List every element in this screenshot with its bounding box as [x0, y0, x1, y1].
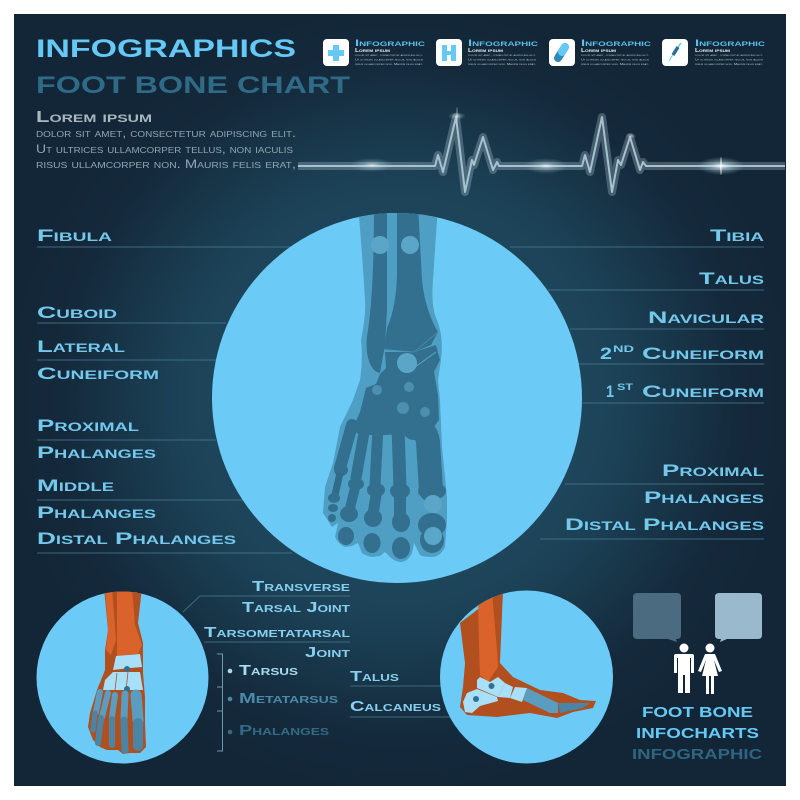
phalanges	[328, 464, 446, 559]
speech bubble: right	[715, 593, 762, 642]
intro text	[36, 109, 296, 171]
right labels: ND	[613, 344, 635, 354]
left labels: Fibula	[37, 226, 113, 245]
icon block: medical cross: Infographic	[355, 38, 426, 48]
icon block: syringe: dolor sit amet, consectetur adipiscing elit.	[695, 53, 763, 57]
bracket list: foot regions: Phalanges	[239, 723, 329, 739]
fibula	[105, 588, 116, 655]
right labels: Phalanges	[644, 488, 764, 507]
icon block: hospital H: Infographic	[468, 38, 539, 48]
right labels: Cuneiform	[642, 382, 764, 401]
left labels: Phalanges	[37, 443, 156, 462]
icon block: capsule: Lorem ipsum	[581, 48, 617, 54]
left labels: Cuboid	[37, 303, 118, 322]
icon block: medical cross: dolor sit amet, consectetur adipiscing elit.	[355, 53, 423, 57]
icon row	[323, 38, 766, 66]
icon block: medical cross: Lorem ipsum	[355, 48, 391, 54]
label group: joints: Tarsometatarsal	[204, 625, 350, 641]
left labels: Distal Phalanges	[37, 529, 236, 548]
footer title: INFOGRAPHIC	[632, 747, 763, 763]
soft tissue	[88, 588, 146, 754]
right labels: 2	[600, 344, 612, 363]
right labels: Talus	[699, 269, 764, 288]
icon block: syringe: Ut ultrices ullamcorper tellus, non iaculis	[695, 58, 764, 62]
tibia	[117, 588, 142, 656]
tibia	[384, 205, 438, 352]
leader lines: main labels	[37, 247, 764, 553]
bracket list: foot regions: Tarsus	[239, 663, 298, 679]
label group: joints	[183, 579, 350, 661]
label group: talus and calcaneus: Talus	[350, 669, 399, 685]
speech bubble: left	[633, 593, 681, 642]
tibia	[478, 592, 498, 682]
footer title: FOOT BONE	[642, 705, 753, 721]
main circle: foot X-ray	[212, 205, 582, 583]
bracket list: foot regions: Metatarsus	[239, 691, 338, 707]
icon block: syringe: risus ullamcorper non. Mauris felis erat.	[695, 62, 763, 66]
icon: man	[674, 644, 694, 693]
icon block: hospital H: Lorem ipsum	[468, 48, 504, 54]
icon block: medical cross: risus ullamcorper non. Mauris felis erat.	[355, 62, 423, 66]
icon: woman	[698, 644, 722, 694]
left labels: Middle	[37, 476, 114, 495]
icon block: capsule	[549, 38, 652, 66]
footer title: INFOCHARTS	[636, 726, 759, 742]
intro text: Lorem ipsum	[36, 109, 152, 126]
label group: joints: Transverse	[252, 579, 350, 595]
right labels: Cuneiform	[642, 344, 764, 363]
footer title	[632, 705, 763, 763]
metatarsals	[96, 692, 138, 720]
intro text: risus ullamcorper non. Mauris felis erat,	[36, 159, 296, 171]
label group: talus and calcaneus: Calcaneus	[350, 699, 441, 715]
intro text: dolor sit amet, consectetur adipiscing elit.	[36, 128, 296, 140]
small circle: side view of foot	[440, 590, 613, 764]
phalanges	[558, 703, 590, 713]
subtitle: FOOT BONE CHART	[36, 72, 350, 99]
icon block: syringe: Infographic	[695, 38, 766, 48]
title: INFOGRAPHICS	[36, 35, 296, 63]
icon block: capsule: Infographic	[581, 38, 652, 48]
right labels: Proximal	[662, 461, 764, 480]
icon block: hospital H: risus ullamcorper non. Mauris felis erat.	[468, 62, 536, 66]
icon block: hospital H: dolor sit amet, consectetur adipiscing elit.	[468, 53, 536, 57]
heartbeat line	[298, 107, 785, 192]
right labels: Navicular	[648, 308, 765, 327]
metatarsals	[523, 688, 558, 713]
icon block: medical cross: Ut ultrices ullamcorper tellus, non iaculis	[355, 58, 424, 62]
left labels: Phalanges	[37, 503, 156, 522]
left labels	[37, 226, 236, 548]
tarsal bones	[477, 677, 505, 697]
joint highlights	[371, 236, 442, 545]
icon block: medical cross	[323, 38, 426, 66]
right labels: ST	[617, 382, 634, 392]
left labels: Lateral	[37, 337, 125, 356]
bracket list: foot regions	[217, 654, 338, 751]
label group: joints: Joint	[305, 645, 350, 661]
label group: talus and calcaneus	[350, 669, 462, 717]
right labels: 1	[606, 382, 614, 401]
soft tissue	[460, 590, 596, 718]
intro text: Ut ultrices ullamcorper tellus, non iaculis	[36, 144, 293, 156]
phalanges	[93, 713, 138, 750]
icon block: capsule: risus ullamcorper non. Mauris felis erat.	[581, 62, 649, 66]
icon block: capsule: dolor sit amet, consectetur adipiscing elit.	[581, 53, 649, 57]
icon block: hospital H	[436, 38, 539, 66]
label group: joints: Tarsal Joint	[242, 600, 350, 616]
right labels: Distal Phalanges	[565, 515, 764, 534]
left labels: Cuneiform	[37, 364, 159, 383]
right labels: Tibia	[710, 226, 765, 245]
fibula	[366, 205, 387, 373]
small circle: front view of foot	[36, 588, 208, 764]
icon block: syringe: Lorem ipsum	[695, 48, 731, 54]
icon block: hospital H: Ut ultrices ullamcorper tellus, non iaculis	[468, 58, 537, 62]
icon block: capsule: Ut ultrices ullamcorper tellus, non iaculis	[581, 58, 650, 62]
right labels	[565, 226, 765, 534]
talus and tarsal bones	[352, 345, 440, 435]
icon block: syringe	[662, 38, 766, 66]
left labels: Proximal	[37, 416, 139, 435]
metatarsals	[340, 425, 431, 490]
foot soft tissue	[323, 205, 447, 562]
tarsal bones	[113, 654, 142, 670]
